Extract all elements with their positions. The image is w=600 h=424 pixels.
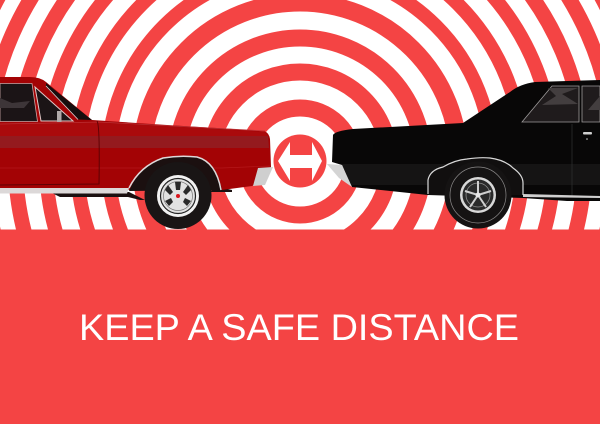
red car mirror bbox=[57, 111, 62, 122]
black car rear window bbox=[522, 86, 579, 122]
red car tire bbox=[144, 162, 212, 229]
red car rear window bbox=[0, 84, 38, 122]
black car wheel arch bbox=[428, 158, 523, 195]
red car windshield chrome bbox=[46, 86, 78, 120]
red car bbox=[0, 77, 273, 229]
black car front window bbox=[582, 86, 600, 122]
red car body highlight band bbox=[0, 136, 269, 148]
black car bbox=[327, 80, 600, 228]
black car door handle bbox=[583, 132, 592, 140]
red car side window bbox=[35, 87, 73, 121]
black car bumper bbox=[327, 164, 352, 187]
black car tire bbox=[444, 162, 512, 228]
red car wheel arch bbox=[129, 156, 222, 191]
concentric target background bbox=[0, 0, 600, 230]
red car bumper bbox=[253, 167, 273, 186]
red car windshield bbox=[46, 83, 92, 120]
red car door line bbox=[0, 121, 99, 185]
red car sill chrome bbox=[0, 188, 129, 194]
red car underbody bbox=[50, 186, 232, 200]
black car body bbox=[332, 80, 600, 201]
icon: double-headed distance arrow bbox=[274, 134, 326, 188]
bottom red panel bbox=[0, 230, 600, 424]
red car hub bbox=[157, 175, 199, 217]
red car body bbox=[0, 77, 271, 190]
red car upper body highlight bbox=[0, 122, 268, 136]
title: KEEP A SAFE DISTANCE bbox=[79, 307, 519, 348]
black car lower band bbox=[342, 164, 600, 185]
black car sill chrome bbox=[523, 194, 600, 198]
black car hub bbox=[460, 177, 496, 213]
black car door line bbox=[571, 124, 573, 196]
